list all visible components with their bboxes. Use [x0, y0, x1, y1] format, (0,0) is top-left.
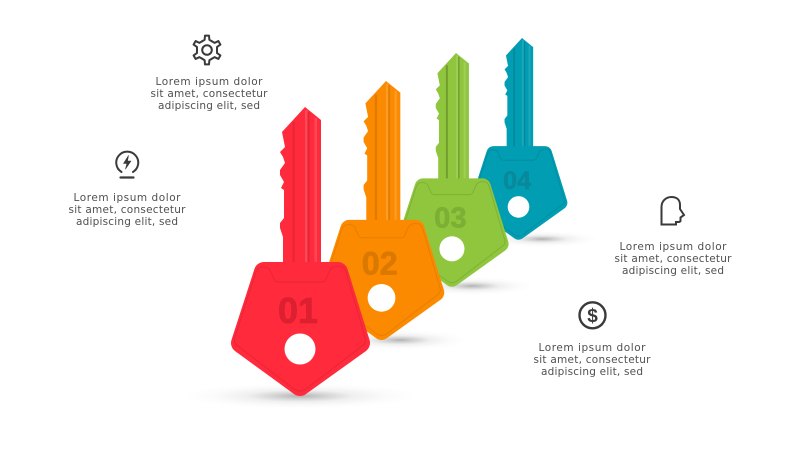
icon: dollar coin — [580, 302, 606, 328]
key 01 — [234, 107, 366, 391]
text: dollar block — [534, 342, 651, 378]
shadow: key 03 — [410, 277, 534, 295]
text: dollar block: adipiscing elit, sed — [541, 366, 643, 378]
text: dollar block: Lorem ipsum dolor — [538, 342, 646, 354]
text: gear block: sit amet, consectetur — [150, 88, 268, 100]
icon: gear — [192, 36, 222, 64]
text: head block — [614, 241, 732, 277]
key 02 — [323, 81, 440, 335]
text: dollar block: sit amet, consectetur — [534, 354, 651, 366]
text: bulb block: sit amet, consectetur — [68, 204, 186, 216]
shadow: key 02 — [332, 330, 468, 350]
icon: light bulb — [116, 152, 138, 178]
key hole 04 — [508, 196, 529, 218]
text: gear block: adipiscing elit, sed — [158, 100, 260, 112]
shadow: key 04 — [486, 231, 598, 247]
key hole 02 — [368, 284, 395, 312]
number 02: 02 — [362, 246, 398, 282]
text: head block: sit amet, consectetur — [614, 253, 732, 265]
icon: dollar coin: $ — [587, 306, 598, 327]
text: gear block — [150, 76, 268, 112]
key hole 03 — [439, 236, 464, 261]
text: bulb block — [68, 192, 186, 228]
key 03 — [399, 53, 505, 283]
icon: head profile — [662, 197, 684, 224]
number 04: 04 — [503, 167, 531, 195]
text: bulb block: adipiscing elit, sed — [76, 216, 178, 228]
text: head block: adipiscing elit, sed — [622, 265, 724, 277]
text: head block: Lorem ipsum dolor — [620, 241, 727, 253]
number 01: 01 — [278, 290, 318, 331]
key 04 — [473, 38, 564, 236]
key hole 01 — [284, 334, 316, 364]
text: bulb block: Lorem ipsum dolor — [74, 192, 181, 204]
shadow: key 01 — [182, 383, 418, 409]
number 03: 03 — [434, 203, 467, 235]
text: gear block: Lorem ipsum dolor — [156, 76, 263, 88]
